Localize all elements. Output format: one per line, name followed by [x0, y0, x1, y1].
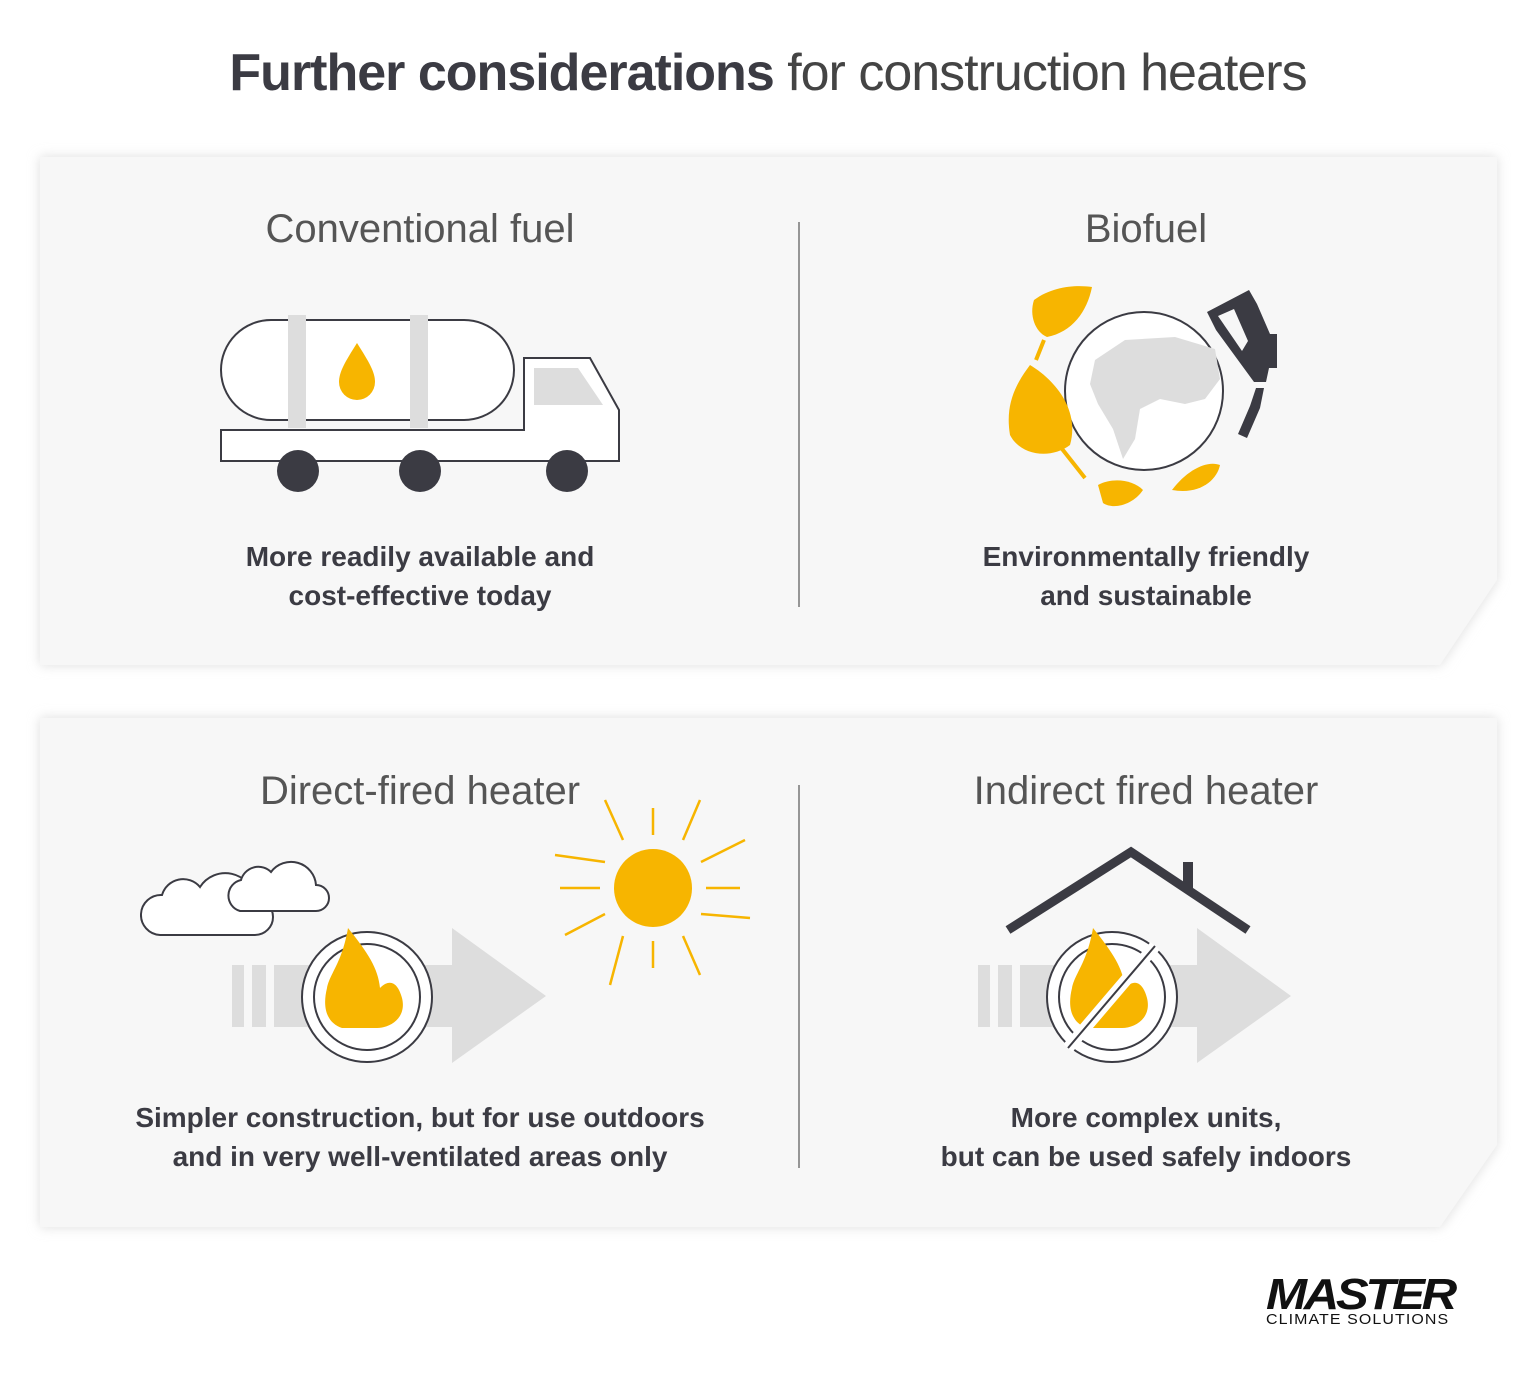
text: biofuel: Environmentally friendly: [983, 541, 1309, 572]
text: indirect fired heater: but can be used safely indoors: [941, 1141, 1351, 1172]
text: biofuel: [983, 541, 1310, 611]
text: biofuel: and sustainable: [1040, 580, 1252, 611]
heading: indirect fired heater: Indirect fired heater: [974, 769, 1318, 813]
icon: globe with leaves and pump: [1008, 286, 1277, 506]
text: conventional fuel: More readily available and: [246, 541, 594, 572]
icon: fuel truck: [220, 315, 620, 492]
title: Further considerations for construction heaters: [229, 44, 1307, 102]
text: conventional fuel: cost-effective today: [289, 580, 551, 611]
icon: indirect heater under roof: [978, 846, 1291, 1063]
text: direct-fired heater: Simpler construction, but for use outdoors: [135, 1102, 705, 1133]
heading: biofuel: Biofuel: [1085, 207, 1207, 251]
logo: Master Climate Solutions: MASTER: [1266, 1270, 1454, 1319]
text: direct-fired heater: [135, 1102, 705, 1172]
heading: conventional fuel: Conventional fuel: [265, 207, 575, 251]
text: indirect fired heater: [941, 1102, 1351, 1172]
text: indirect fired heater: More complex units,: [1011, 1102, 1281, 1133]
logo: Master Climate Solutions: CLIMATE SOLUTIONS: [1266, 1312, 1449, 1328]
text: conventional fuel: [246, 541, 594, 611]
heading: direct-fired heater: Direct-fired heater: [260, 769, 580, 813]
text: direct-fired heater: and in very well-ventilated areas only: [173, 1141, 667, 1172]
icon: direct-fired heater with sun and clouds: [140, 800, 750, 1063]
